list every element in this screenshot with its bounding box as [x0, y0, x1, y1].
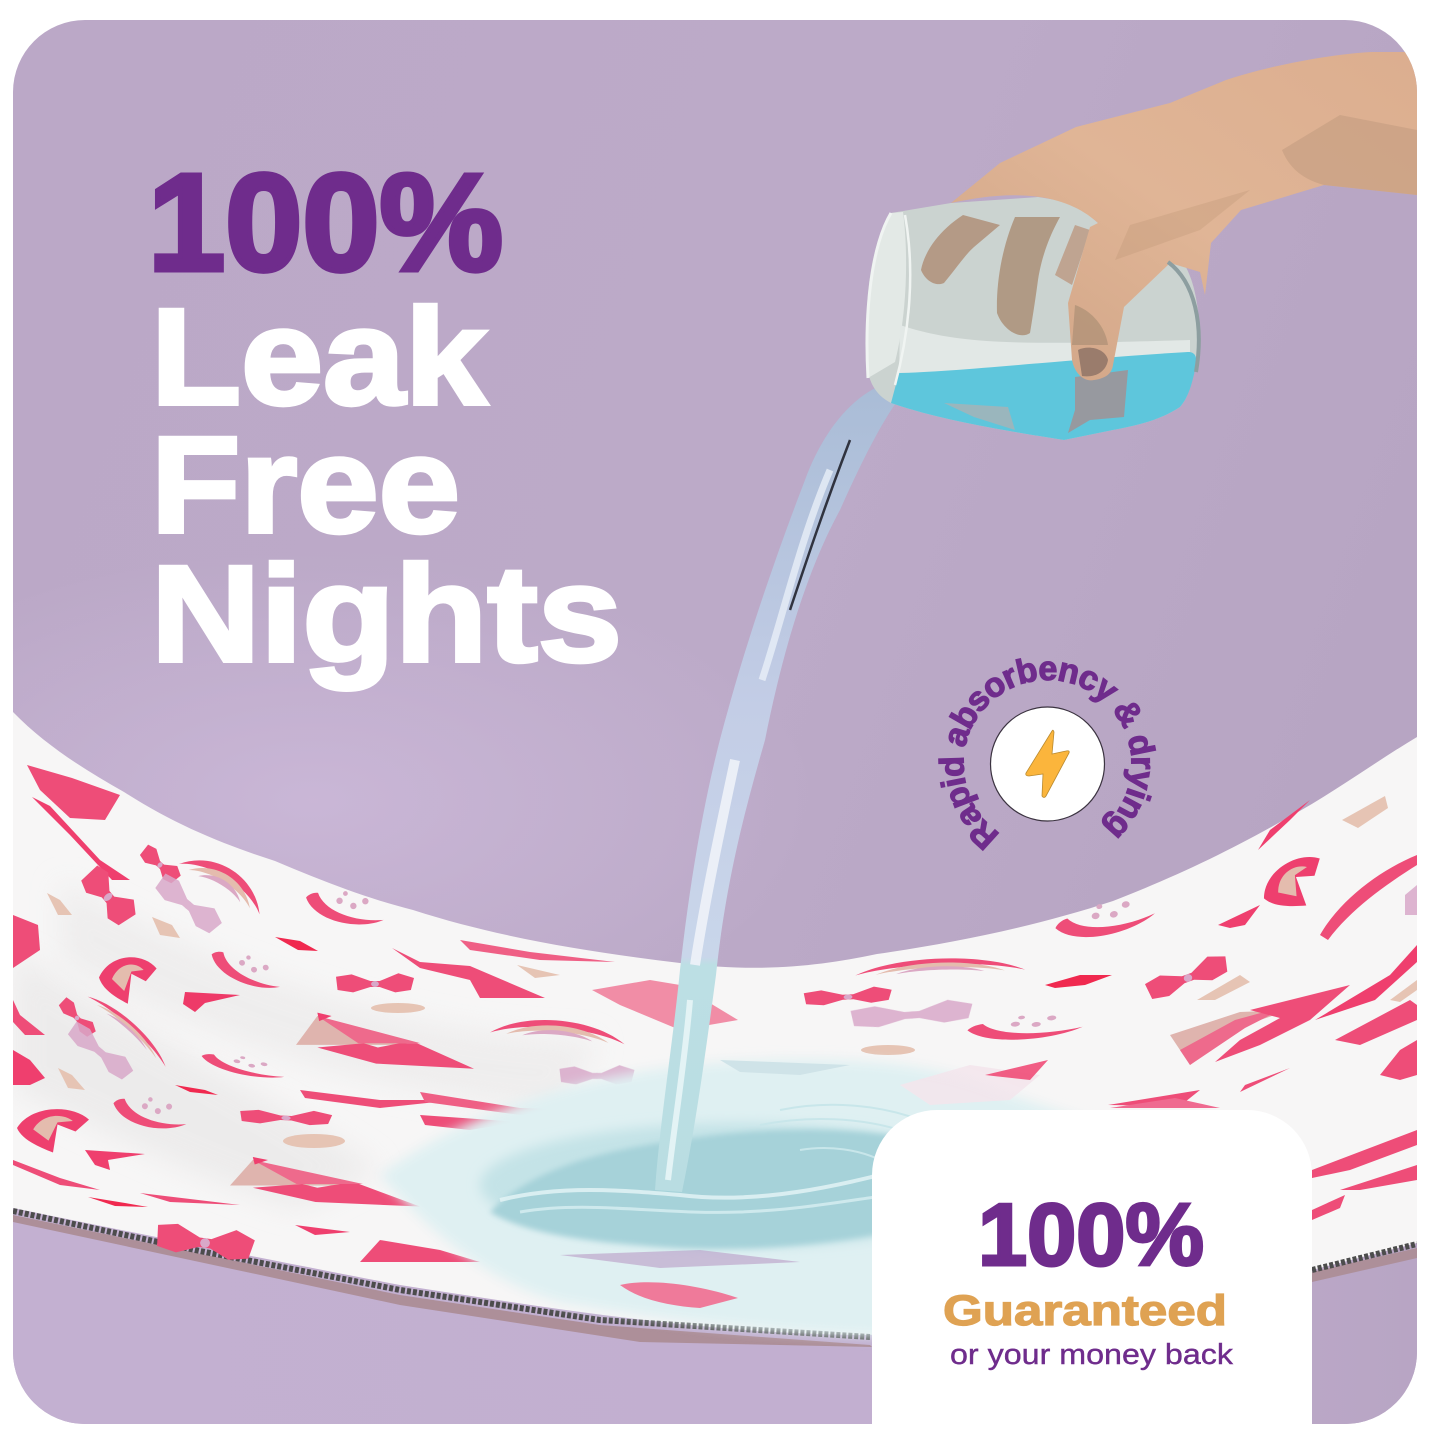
curved badge text: Rapid absorbency & drying: [938, 658, 1156, 852]
arm and hand: [951, 52, 1417, 380]
glass body: [866, 197, 1199, 440]
title: [148, 146, 622, 691]
badge circle: [990, 707, 1104, 821]
water stream: [655, 382, 898, 1192]
title line: Nights: Nights: [151, 538, 622, 691]
stitched hem: [13, 1211, 870, 1337]
fabric shading: [24, 980, 348, 1188]
card figure: 100%: [978, 1185, 1204, 1284]
print pattern: right side: [804, 800, 1417, 1220]
title line: Leak: Leak: [151, 281, 488, 434]
fingers through glass: [921, 215, 1000, 284]
badge: rapid absorbency: [938, 658, 1156, 852]
blue water: [891, 352, 1196, 440]
fabric underside: [13, 1215, 1417, 1347]
card: guarantee: [872, 1110, 1312, 1424]
panel: fabric changing mat: [13, 712, 1417, 1337]
icon: lightning bolt: [1026, 730, 1069, 798]
hand and glass: [866, 52, 1417, 440]
glass rim and far edge: [867, 213, 891, 378]
card subtext: or your money back: [950, 1339, 1234, 1371]
title line: Free: Free: [151, 409, 460, 562]
print pattern: left side: [13, 765, 738, 1263]
water pool: [380, 1060, 1100, 1340]
title figure: 100%: [148, 146, 503, 300]
card heading: Guaranteed: [943, 1287, 1227, 1335]
